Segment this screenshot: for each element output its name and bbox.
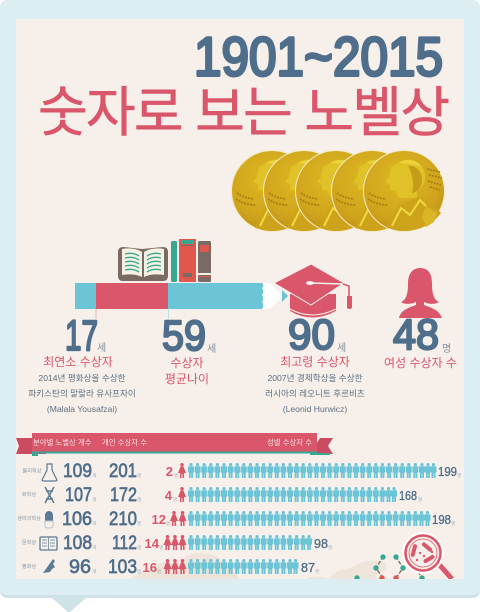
row: literature: 14 — [145, 536, 160, 551]
row: physics: 개 — [92, 472, 96, 479]
row: physics — [22, 460, 186, 482]
row: chemistry: 4 — [165, 488, 173, 503]
stat: average: 평균나이 — [165, 372, 209, 386]
ribbon header: 개인 수상자 수 — [102, 438, 147, 447]
ribbon header — [16, 433, 333, 456]
row: medicine: 210 — [109, 508, 137, 530]
value: medicine men: 명 — [451, 520, 455, 526]
stat: women — [384, 311, 457, 370]
row: literature: 명 — [159, 544, 163, 550]
row: peace — [22, 556, 186, 578]
value: medicine men: 198 — [432, 512, 451, 527]
icon: woman silhouette — [399, 268, 442, 318]
row: literature: 112 — [112, 532, 137, 554]
pictogram bar: chemistry men — [188, 487, 397, 502]
row: chemistry: 명 — [137, 496, 141, 502]
row: medicine: 명 — [137, 520, 141, 526]
row: peace: 103 — [108, 556, 137, 578]
stat: oldest: 세 — [337, 342, 346, 354]
medals — [231, 150, 445, 232]
stat: women: 명 — [442, 343, 451, 355]
stat: average: 세 — [207, 343, 216, 355]
stat: oldest: 90 — [288, 311, 335, 359]
icon: flask — [42, 464, 57, 481]
row: literature — [22, 532, 186, 554]
pencil age bar — [75, 283, 288, 319]
value: chemistry men: 명 — [418, 496, 422, 502]
pictogram bar: medicine men — [188, 511, 430, 526]
row: literature: 개 — [92, 544, 96, 551]
row: peace: 평화상 — [22, 562, 36, 570]
row: medicine: 명 — [166, 520, 170, 526]
pictogram bar: literature men — [188, 535, 312, 550]
row: physics: 명 — [137, 472, 141, 478]
value: literature men: 98 — [314, 536, 328, 551]
icon: dove — [43, 559, 55, 573]
stat: youngest: 17 — [65, 312, 98, 360]
icon: grey book — [198, 241, 211, 282]
stat: women: 48 — [393, 311, 439, 359]
row: peace: 명 — [137, 568, 141, 574]
stat: oldest: 최고령 수상자 — [280, 355, 350, 369]
row: physics: 201 — [109, 460, 137, 482]
row: chemistry — [22, 484, 186, 506]
row: peace: 명 — [157, 568, 161, 574]
row: medicine — [17, 508, 186, 530]
stat: women: 여성 수상자 수 — [384, 356, 457, 370]
row: medicine: 생리의학상 — [17, 514, 41, 522]
row: chemistry: 개 — [92, 496, 96, 503]
row: peace: 96 — [69, 556, 91, 578]
row: chemistry: 107 — [65, 484, 92, 506]
row: chemistry: 172 — [110, 484, 137, 506]
row: medicine: 개 — [92, 520, 96, 527]
row: physics: 2 — [166, 464, 173, 479]
row: chemistry: 화학상 — [22, 490, 36, 498]
row: medicine: 106 — [62, 508, 92, 530]
icon: capsule — [45, 511, 53, 528]
stat: average: 수상자 — [170, 356, 204, 370]
title: korean heading: 숫자로 보는 노벨상 — [38, 83, 450, 143]
stat: youngest: (Malala Yousafzai) — [47, 404, 117, 414]
value: physics men: 명 — [457, 472, 461, 478]
icon: dna helix — [45, 487, 54, 503]
row: chemistry: 명 — [173, 496, 177, 502]
row: physics: 물리학상 — [22, 466, 42, 474]
row: peace: 개 — [92, 568, 96, 575]
stat: oldest: 2007년 경제학상을 수상한 — [267, 372, 363, 383]
value: physics men: 199 — [438, 464, 457, 479]
stat: average: 59 — [162, 312, 206, 360]
stat: oldest: (Leonid Hurwicz) — [283, 404, 347, 414]
icon: book — [40, 537, 57, 550]
title: years: 1901~2015 — [194, 26, 443, 88]
ribbon header: 분야별 노벨상 개수 — [33, 438, 92, 447]
icon: magnifier — [403, 533, 452, 579]
icon: open book — [118, 247, 168, 281]
ribbon header: 성별 수상자 수 — [267, 438, 312, 447]
icon: graduation cap — [274, 264, 352, 318]
row: literature: 문학상 — [22, 538, 36, 546]
icon: red book — [179, 239, 196, 282]
stat: average — [162, 312, 216, 386]
row: physics: 명 — [174, 472, 178, 478]
map decoration and molecule — [130, 533, 452, 581]
pictogram bar: physics men — [188, 463, 436, 478]
pictogram bar: peace men — [188, 559, 298, 574]
stat: oldest: 러시아의 레오니트 후르비츠 — [265, 388, 365, 398]
stat: youngest: 최연소 수상자 — [43, 355, 113, 369]
molecule — [354, 554, 425, 581]
value: literature men: 명 — [328, 544, 332, 550]
stat: youngest: 세 — [97, 342, 106, 354]
stat: oldest — [265, 311, 365, 414]
row: physics: 109 — [63, 460, 92, 482]
stat: youngest — [28, 312, 136, 414]
value: peace men: 87 — [301, 560, 315, 575]
row: literature: 명 — [137, 544, 141, 550]
value: chemistry men: 168 — [399, 488, 417, 503]
stat: youngest: 파키스탄의 말랄라 유사프자이 — [28, 388, 136, 398]
row: literature: 108 — [63, 532, 92, 554]
icon: green book — [171, 241, 177, 282]
row: medicine: 12 — [152, 512, 166, 527]
stat: youngest: 2014년 평화상을 수상한 — [38, 373, 126, 383]
row: peace: 16 — [143, 560, 157, 575]
value: peace men: 명 — [315, 568, 319, 574]
